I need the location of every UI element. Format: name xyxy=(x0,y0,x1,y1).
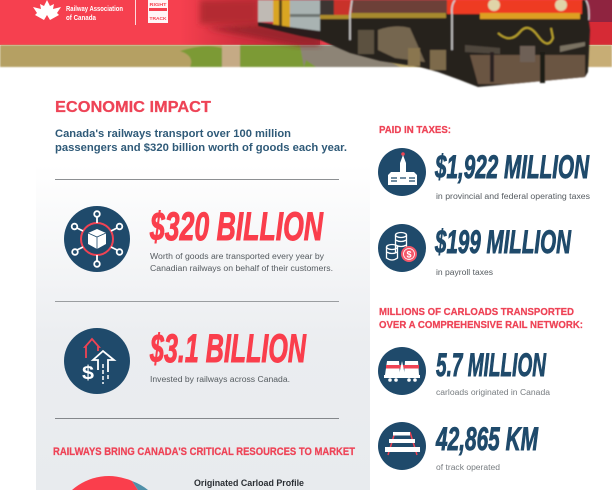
stat: $3.1 billion: Invested by railways across Canada. xyxy=(150,375,290,384)
stat: $320 billion xyxy=(149,205,333,273)
logo: Railway Association of Canada xyxy=(33,0,168,25)
logo: Railway Association of Canada: of Canada xyxy=(66,13,97,22)
icon: railcars xyxy=(378,347,426,395)
stat: 5.7 million: carloads originated in Canada xyxy=(436,388,551,397)
icon: investment arrows: $ xyxy=(82,363,94,384)
stat: $199 million: in payroll taxes xyxy=(436,268,493,277)
freight cars xyxy=(200,0,320,46)
header banner xyxy=(0,0,612,67)
logo: Railway Association of Canada: Railway Association xyxy=(66,4,123,13)
icon: investment arrows xyxy=(64,328,130,394)
icon: rail track xyxy=(378,422,426,470)
left panel background xyxy=(36,165,370,490)
heading: millions of carloads: OVER A COMPREHENSIVE RAIL NETWORK: xyxy=(379,319,583,331)
intro text xyxy=(55,128,347,154)
icon: parliament xyxy=(378,148,426,196)
icon: coins: $ xyxy=(406,250,412,260)
logo: Railway Association of Canada: RIGHT xyxy=(150,2,167,8)
heading: economic impact: ECONOMIC IMPACT xyxy=(55,99,212,116)
train photo xyxy=(200,0,590,87)
stat: $1,922 million: in provincial and federal operating taxes xyxy=(436,192,590,201)
stat: $320 billion: $320 BILLION xyxy=(149,205,324,249)
stat: $1,922 million xyxy=(434,149,590,201)
heading: paid in taxes: PAID IN TAXES: xyxy=(379,125,451,136)
intro text: Canada's railways transport over 100 million xyxy=(55,128,291,140)
stat: $3.1 billion xyxy=(149,327,307,384)
stat: 42,865 km: of track operated xyxy=(436,463,500,472)
stat: 5.7 million xyxy=(436,347,551,397)
stat: 42,865 km xyxy=(435,421,539,472)
heading: millions of carloads xyxy=(379,306,583,331)
pie chart xyxy=(72,476,148,490)
heading: millions of carloads: MILLIONS OF CARLOADS TRANSPORTED xyxy=(379,306,574,318)
logo: Railway Association of Canada: TRACK xyxy=(150,16,167,22)
icon: network cube xyxy=(64,206,130,272)
stat: $199 million xyxy=(434,224,572,277)
field strip xyxy=(0,45,612,67)
intro text: passengers and $320 billion worth of goods each year. xyxy=(55,142,347,154)
stat: $320 billion: Canadian railways on behalf of their customers. xyxy=(150,264,333,273)
icon: coins xyxy=(378,224,426,272)
chart title: Originated Carload Profile xyxy=(194,478,304,488)
heading: critical resources: RAILWAYS BRING CANADA'S CRITICAL RESOURCES TO MARKET xyxy=(53,446,355,458)
stat: $3.1 billion: $3.1 BILLION xyxy=(149,327,307,371)
locomotive body xyxy=(320,0,590,87)
stat: 42,865 km: 42,865 KM xyxy=(435,421,539,457)
stat: $320 billion: Worth of goods are transported every year by xyxy=(150,252,324,261)
